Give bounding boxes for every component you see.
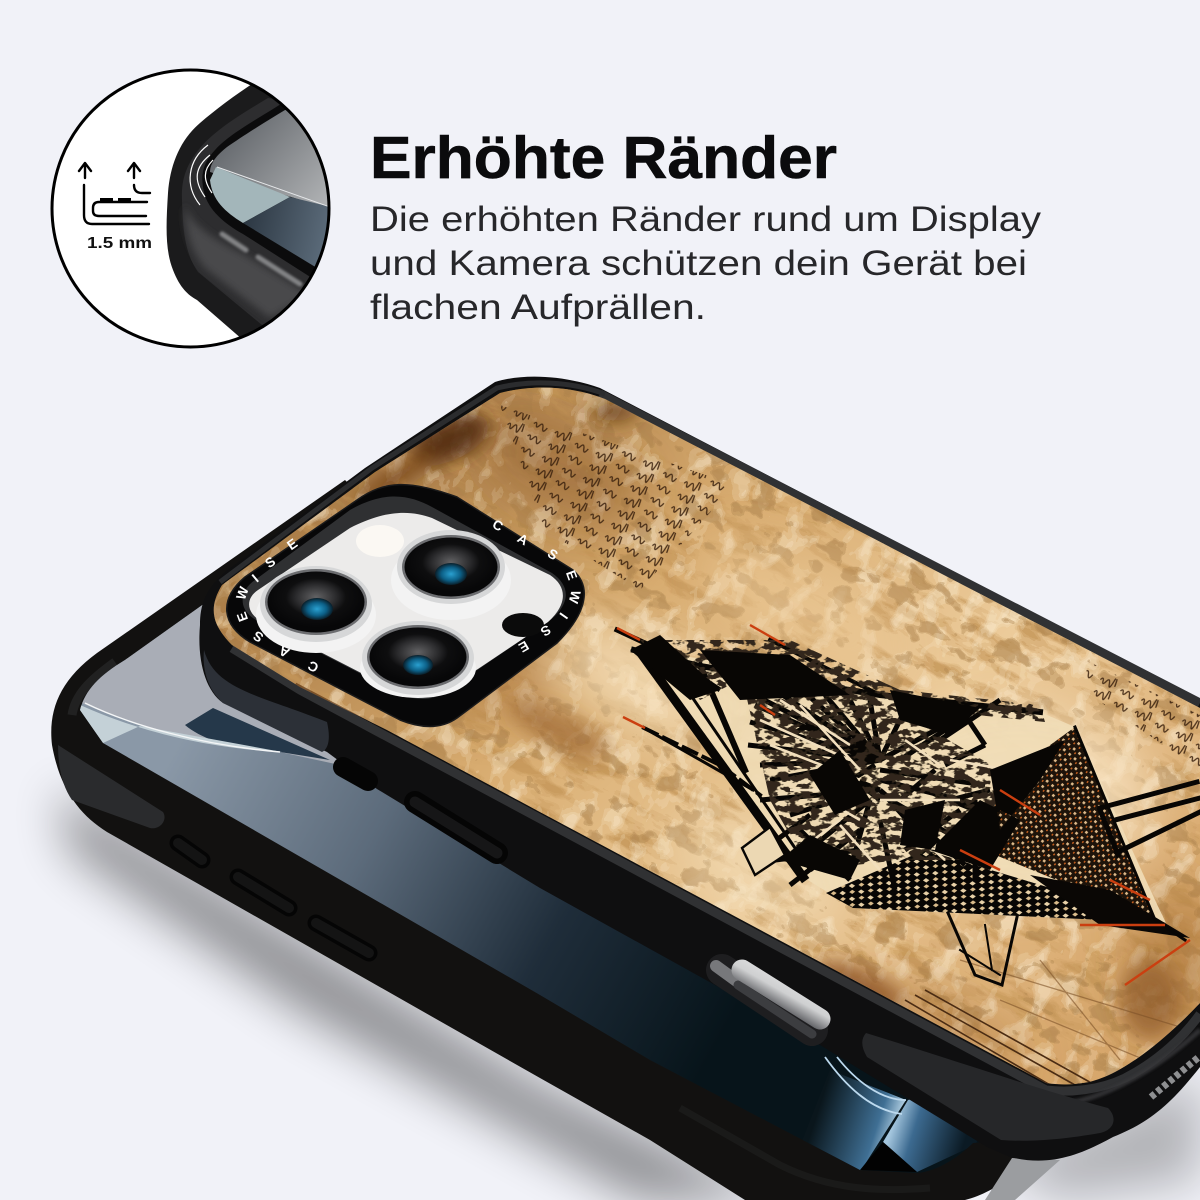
brand ring lettering: A	[515, 531, 531, 548]
camera module	[227, 485, 584, 726]
light and stain patches	[466, 391, 1200, 1068]
body text: flachen Aufprällen.	[370, 288, 706, 327]
white camera plate	[249, 513, 563, 698]
bottom-left dark lining near camera	[296, 682, 374, 724]
camera ring	[227, 485, 584, 726]
volume and mute buttons	[178, 843, 369, 953]
brand ring lettering: E	[284, 536, 300, 553]
charging port	[716, 966, 820, 1034]
back phone case	[51, 470, 1060, 1200]
right tip	[1030, 875, 1190, 938]
phone screen	[80, 604, 979, 1173]
brand ring lettering: E	[234, 610, 251, 624]
label: 1.5 mm: 1.5 mm	[87, 235, 152, 252]
brand ring lettering: S	[250, 628, 266, 645]
brand ring lettering: W	[566, 589, 583, 605]
brand ring lettering: C	[490, 517, 506, 534]
brand ring lettering: E	[516, 638, 531, 655]
screen light beams	[810, 1072, 906, 1170]
lower ruled lines	[905, 990, 1095, 1085]
symbol illustration	[617, 625, 1200, 985]
flash	[356, 525, 404, 557]
inner wall	[243, 496, 566, 699]
brand ring lettering: S	[545, 546, 561, 563]
brand ring lettering: I	[249, 571, 262, 585]
handwriting rows	[500, 405, 735, 590]
central spokes	[745, 688, 1000, 890]
drop shadows	[60, 790, 1200, 1200]
speckled ink mass	[745, 690, 1000, 870]
lower right phone detail	[985, 1158, 1060, 1200]
lens: left	[260, 566, 372, 642]
lens: top right	[397, 530, 505, 604]
cream base	[638, 650, 1166, 923]
lens bumps	[256, 540, 511, 698]
camera side pad	[204, 650, 329, 752]
rim highlight	[72, 662, 115, 715]
brand ring lettering: I	[556, 610, 571, 622]
mute switch	[343, 767, 368, 781]
checker triangle	[826, 850, 1166, 923]
brand ring lettering: C	[305, 658, 321, 675]
highlights	[760, 700, 1010, 870]
upper speckled band	[640, 640, 1045, 722]
body text: Die erhöhten Ränder rund um Display	[370, 200, 1042, 239]
body text	[370, 200, 1042, 327]
front phone case	[199, 377, 1200, 1161]
brand ring lettering: W	[233, 584, 252, 602]
lens: bottom	[362, 621, 474, 695]
side button	[415, 802, 497, 853]
carbon pads	[862, 1033, 1114, 1141]
icon: raised edge diagram	[79, 163, 150, 224]
upper rim edge	[220, 383, 605, 582]
speaker grille	[1151, 1056, 1200, 1097]
brand ring lettering: S	[262, 554, 278, 571]
case back artwork	[214, 388, 1200, 1084]
case outer highlight	[1040, 1030, 1200, 1105]
brand ring lettering: S	[538, 622, 554, 639]
close-up of case corner	[167, 82, 340, 340]
title: Erhöhte Ränder	[370, 125, 837, 191]
sensor dot	[502, 613, 544, 637]
frame strokes	[617, 630, 1200, 985]
small glyph box	[742, 827, 785, 875]
solid black accents	[630, 635, 1065, 880]
lattice panel	[995, 728, 1152, 915]
parchment texture	[214, 388, 1200, 1084]
callout: raised edge circle	[52, 70, 340, 347]
brand ring lettering: E	[563, 568, 580, 582]
brand ring lettering: A	[276, 643, 292, 660]
brand ring lettering	[233, 517, 583, 675]
body text: und Kamera schützen dein Gerät bei	[370, 244, 1027, 283]
carbon corner pad	[58, 745, 165, 828]
red accents	[617, 625, 1190, 985]
case rim edge	[232, 394, 1200, 1091]
